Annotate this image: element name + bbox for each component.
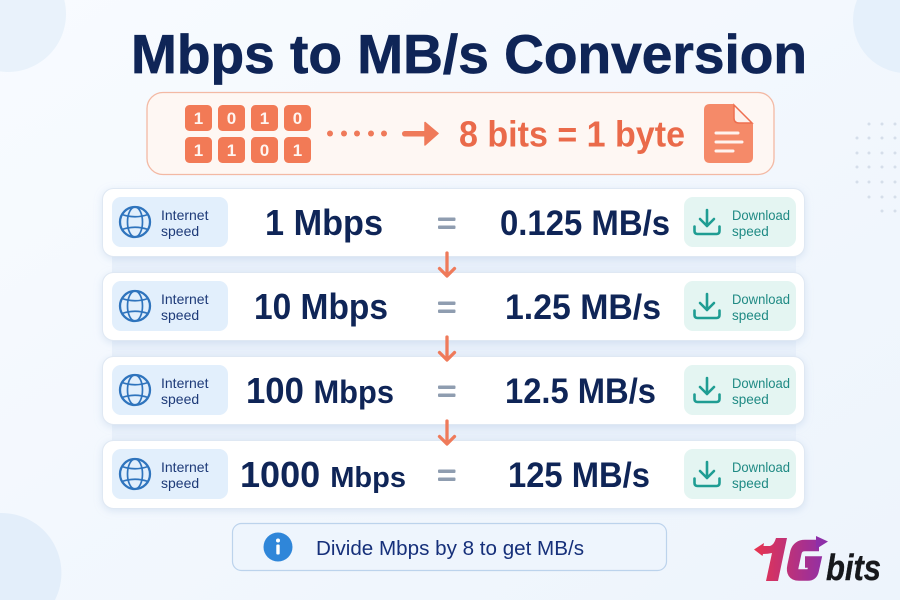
callout: divide rule bbox=[232, 524, 666, 570]
result: 125 MB/s bbox=[508, 456, 650, 495]
dotted arrow bbox=[327, 122, 438, 145]
equals bbox=[438, 470, 456, 481]
value: 100 Mbps bbox=[246, 370, 394, 411]
logo: 1Gbits bbox=[754, 536, 881, 588]
internet speed tag: Internet bbox=[161, 291, 209, 307]
internet speed tag: speed bbox=[161, 223, 199, 239]
binary grid: 0 bbox=[227, 109, 236, 128]
binary grid: 1 bbox=[293, 141, 302, 160]
download speed tag: Download bbox=[732, 292, 790, 307]
binary grid: 0 bbox=[293, 109, 302, 128]
download speed tag: speed bbox=[732, 392, 769, 407]
download speed tag bbox=[684, 197, 796, 247]
row: 10 Mbps bbox=[102, 272, 804, 340]
equals bbox=[438, 218, 456, 229]
equals bbox=[438, 386, 456, 397]
download speed tag: Download bbox=[732, 460, 790, 475]
internet speed tag bbox=[112, 197, 228, 247]
download speed tag bbox=[684, 281, 796, 331]
equation text: 8 bits = 1 byte bbox=[459, 114, 685, 154]
result: 0.125 MB/s bbox=[500, 204, 670, 243]
internet speed tag: Internet bbox=[161, 459, 209, 475]
binary grid: 1 bbox=[260, 109, 269, 128]
internet speed tag: speed bbox=[161, 307, 199, 323]
row: 100 Mbps bbox=[102, 356, 804, 424]
value: 1000 Mbps bbox=[240, 454, 406, 495]
icon: info bbox=[264, 532, 292, 562]
binary grid: 0 bbox=[260, 141, 269, 160]
download speed tag: speed bbox=[732, 224, 769, 239]
dot pattern bbox=[856, 122, 896, 212]
icon: document bbox=[704, 104, 753, 163]
download speed tag bbox=[684, 365, 796, 415]
internet speed tag: speed bbox=[161, 475, 199, 491]
result: 12.5 MB/s bbox=[505, 372, 656, 411]
internet speed tag bbox=[112, 449, 228, 499]
download speed tag: Download bbox=[732, 208, 790, 223]
binary grid: 1 bbox=[227, 141, 236, 160]
row: 1 Mbps bbox=[102, 188, 804, 256]
internet speed tag: Internet bbox=[161, 207, 209, 223]
result: 1.25 MB/s bbox=[505, 288, 661, 327]
title: Mbps to MB/s Conversion bbox=[131, 23, 807, 85]
download speed tag: Download bbox=[732, 376, 790, 391]
internet speed tag bbox=[112, 281, 228, 331]
download speed tag bbox=[684, 449, 796, 499]
equals bbox=[438, 302, 456, 313]
panel: bits to byte bbox=[147, 92, 774, 174]
internet speed tag bbox=[112, 365, 228, 415]
logo: 1Gbits: bits bbox=[826, 547, 881, 588]
arrow: row 3 to row 4 bbox=[440, 421, 454, 444]
row: 1000 Mbps bbox=[102, 440, 804, 508]
binary grid: 1 bbox=[194, 109, 203, 128]
value: 10 Mbps bbox=[254, 286, 388, 327]
callout text: Divide Mbps by 8 to get MB/s bbox=[316, 538, 584, 560]
arrow: row 2 to row 3 bbox=[440, 337, 454, 360]
value: 1 Mbps bbox=[265, 202, 383, 243]
download speed tag: speed bbox=[732, 308, 769, 323]
gap shading between rows bbox=[112, 250, 796, 446]
binary grid bbox=[185, 105, 311, 163]
binary grid: 1 bbox=[194, 141, 203, 160]
internet speed tag: speed bbox=[161, 391, 199, 407]
download speed tag: speed bbox=[732, 476, 769, 491]
arrow: row 1 to row 2 bbox=[440, 253, 454, 276]
internet speed tag: Internet bbox=[161, 375, 209, 391]
